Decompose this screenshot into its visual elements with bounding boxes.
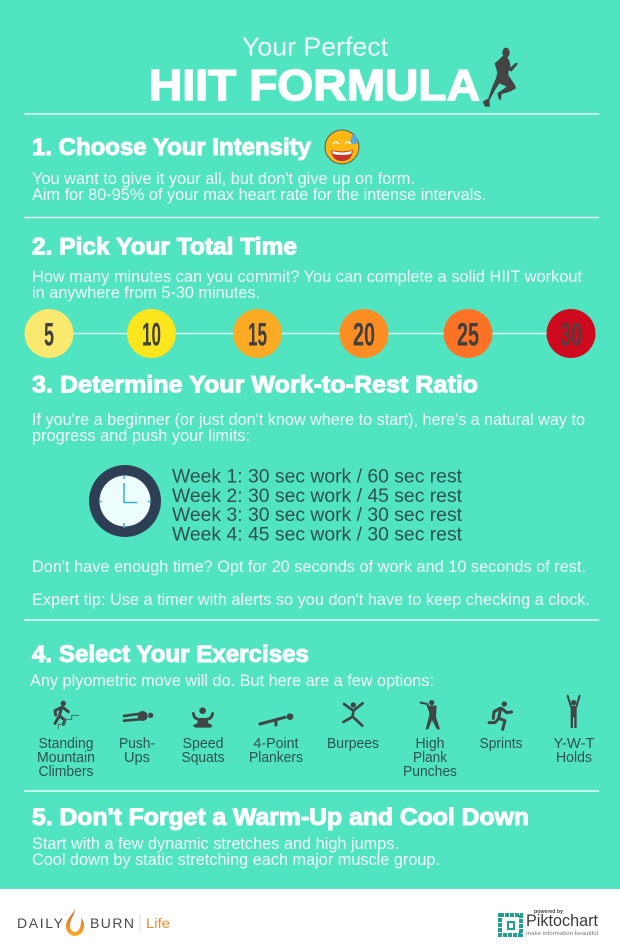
title: HIIT FORMULA <box>149 61 480 110</box>
exercise: standing mountain climbers: Mountain <box>37 750 95 766</box>
exercise: speed squats: Squats <box>182 750 224 766</box>
exercise: y-w-t holds <box>554 696 595 766</box>
timeline stop: 25 <box>444 309 492 358</box>
footer <box>0 889 620 951</box>
timeline stop: 15: 15 <box>248 316 267 352</box>
text: step 3 intro <box>32 410 585 445</box>
exercise: standing mountain climbers: Standing <box>38 736 94 752</box>
text: step 3 intro: If you're a beginner (or just don't know where to start), here's a natural way to <box>32 410 585 429</box>
logo: Daily Burn Life: Life <box>146 915 170 931</box>
timeline stop: 25: 25 <box>457 316 479 352</box>
heading: step 3: 3. Determine Your Work-to-Rest Ratio <box>32 372 478 398</box>
exercise: push-ups <box>119 711 155 766</box>
text: weekly schedule: Week 1: 30 sec work / 60 sec rest <box>172 466 463 488</box>
icon: sweat-smile emoji <box>325 130 359 164</box>
text: step 4 intro: Any plyometric move will do. But here are a few options: <box>30 671 434 690</box>
logo: Piktochart: powered by <box>534 909 563 915</box>
exercise: push-ups: Ups <box>124 750 150 766</box>
exercise: high plank punches: Plank <box>413 750 448 766</box>
logo: Daily Burn Life: BURN <box>90 915 134 931</box>
text: step 1 body <box>32 169 486 204</box>
exercise: standing mountain climbers <box>37 701 95 780</box>
exercise: y-w-t holds: Holds <box>556 750 592 766</box>
heading: step 2: 2. Pick Your Total Time <box>32 234 297 260</box>
timeline stop: 20: 20 <box>353 316 375 352</box>
heading: step 1: 1. Choose Your Intensity <box>32 134 312 161</box>
heading: step 5: 5. Don't Forget a Warm-Up and Cool Down <box>32 804 529 831</box>
exercise: high plank punches <box>403 700 457 780</box>
exercise: push-ups: Push- <box>119 736 155 752</box>
exercise: burpees <box>327 702 379 752</box>
text: step 5 body: Start with a few dynamic stretches and high jumps. <box>32 834 399 853</box>
icon: clock <box>89 465 161 537</box>
text: expert tip: Expert tip: Use a timer with alerts so you don't have to keep checking a clock. <box>32 590 590 609</box>
timeline stop: 5 <box>24 309 74 358</box>
exercise: y-w-t holds: Y-W-T <box>554 736 595 752</box>
logo: Daily Burn Life <box>17 908 170 936</box>
timeline stop: 30 <box>546 309 596 358</box>
timeline stop: 10: 10 <box>142 316 161 352</box>
logo: Daily Burn Life: DAILY <box>17 915 64 931</box>
exercise: speed squats <box>182 707 224 766</box>
timeline stop: 15 <box>233 309 282 358</box>
exercise: sprints <box>480 701 522 752</box>
icon: runner <box>483 48 518 107</box>
exercise: 4-point plankers: Plankers <box>249 750 303 766</box>
text: weekly schedule <box>172 466 463 546</box>
text: step 2 body: in anywhere from 5-30 minutes. <box>32 283 260 302</box>
text: short on time: Don't have enough time? Opt for 20 seconds of work and 10 seconds of rest. <box>32 557 586 576</box>
text: step 3 intro: progress and push your limits: <box>32 426 250 445</box>
title: Your Perfect <box>242 32 389 62</box>
exercise: 4-point plankers: 4-Point <box>254 736 298 752</box>
timeline stop: 5: 5 <box>44 316 54 352</box>
timeline stop: 30: 30 <box>560 316 582 352</box>
text: step 1 body: You want to give it your all, but don't give up on form. <box>32 169 415 188</box>
exercise: speed squats: Speed <box>182 736 224 752</box>
text: weekly schedule: Week 2: 30 sec work / 45 sec rest <box>172 485 463 507</box>
timeline stop: 10 <box>127 309 176 358</box>
text: step 1 body: Aim for 80-95% of your max heart rate for the intense intervals. <box>32 185 486 204</box>
text: step 5 body: Cool down by static stretching each major muscle group. <box>32 850 440 869</box>
text: weekly schedule: Week 3: 30 sec work / 30 sec rest <box>172 504 463 526</box>
logo: Piktochart: make information beautiful <box>526 931 598 937</box>
text: step 5 body <box>32 834 440 869</box>
logo: Piktochart: Piktochart <box>526 911 598 930</box>
text: step 2 body: How many minutes can you commit? You can complete a solid HIIT workout <box>32 267 582 286</box>
heading: step 4: 4. Select Your Exercises <box>32 641 309 668</box>
exercise: high plank punches: Punches <box>403 764 457 780</box>
title <box>149 32 480 110</box>
logo: Piktochart <box>500 909 598 937</box>
text: step 2 body <box>32 267 582 302</box>
timeline: total minutes <box>24 309 596 358</box>
exercise: high plank punches: High <box>416 736 444 752</box>
exercise: 4-point plankers <box>249 713 303 766</box>
timeline stop: 20 <box>340 309 388 358</box>
exercise: standing mountain climbers: Climbers <box>38 764 94 780</box>
exercise: sprints: Sprints <box>480 736 522 752</box>
exercise: burpees: Burpees <box>327 736 379 752</box>
text: weekly schedule: Week 4: 45 sec work / 30 sec rest <box>172 524 463 546</box>
